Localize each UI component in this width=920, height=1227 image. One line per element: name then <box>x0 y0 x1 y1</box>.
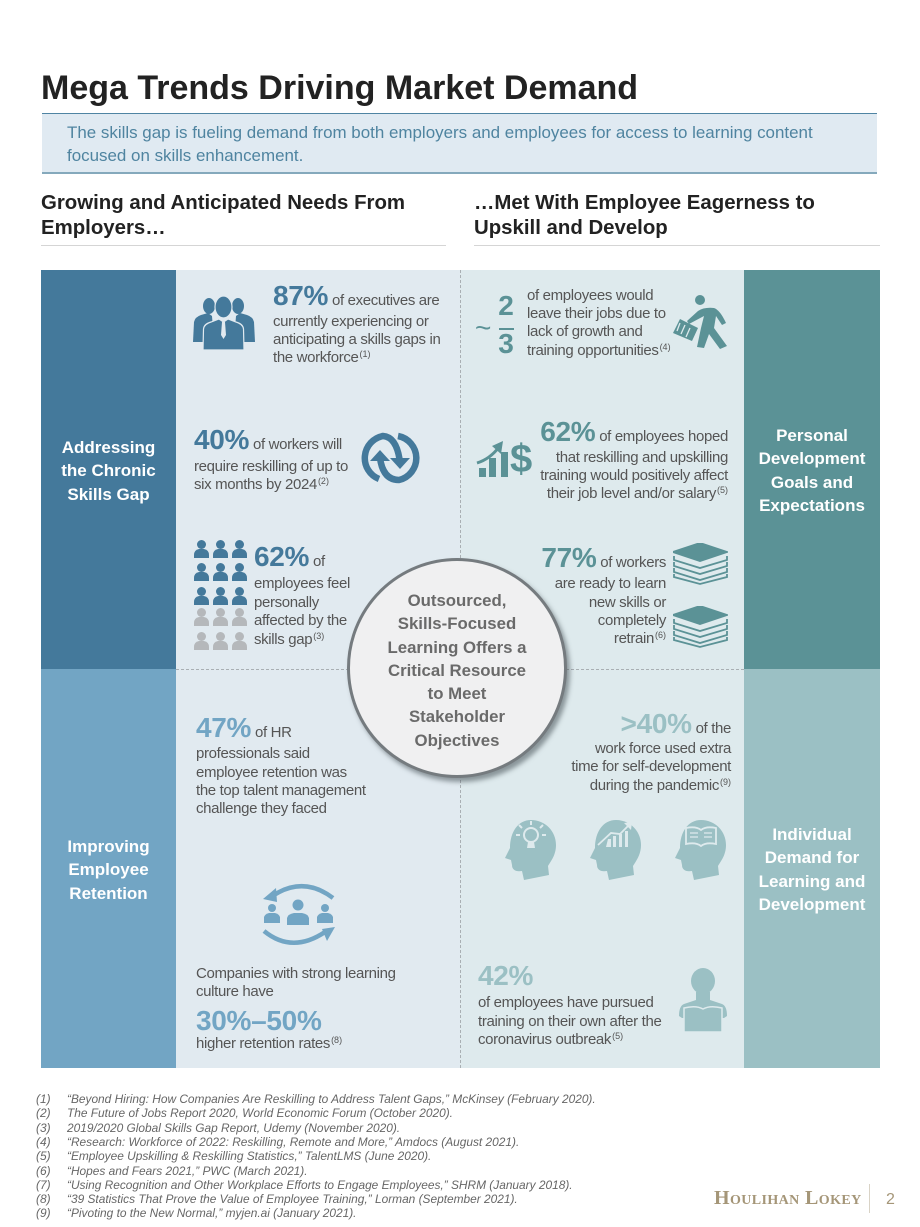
subtitle banner <box>42 113 877 174</box>
stat: 42% of employees pursued training: training on their own after the <box>478 1013 661 1030</box>
footnotes: (9) <box>36 1206 51 1220</box>
footnotes: (8) <box>36 1192 51 1206</box>
stat: two thirds fraction: 2 <box>498 290 514 321</box>
stat: 42% of employees pursued training: 42% <box>478 960 533 991</box>
footnotes: 2019/2020 Global Skills Gap Report, Udemy (November 2020). <box>67 1121 400 1135</box>
footnotes: “Employee Upskilling & Reskilling Statistics,” TalentLMS (June 2020). <box>67 1149 431 1163</box>
panel: addressing the chronic skills gap: Skills Gap <box>67 485 150 504</box>
subtitle banner: The skills gap is fueling demand from both employers and employees for access to learning content <box>67 123 813 142</box>
panel: personal development goals: Goals and <box>771 473 853 492</box>
stat: 42% of employees pursued training: of employees have pursued <box>478 994 654 1011</box>
footnotes <box>36 1092 596 1220</box>
stat: 87% of executives: the workforce(1) <box>273 349 370 366</box>
footnotes: (6) <box>36 1164 51 1178</box>
stat: 42% of employees pursued training: coronavirus outbreak(5) <box>478 1031 623 1048</box>
stat: 30%-50% higher retention: Companies with strong learning <box>196 965 396 982</box>
panel: left content background <box>176 270 460 1068</box>
right column heading: …Met With Employee Eagerness to <box>474 192 815 214</box>
footnotes: “Pivoting to the New Normal,” myjen.ai (January 2021). <box>67 1206 356 1220</box>
left column heading: Growing and Anticipated Needs From <box>41 192 405 214</box>
panel: individual demand: Learning and <box>759 872 865 891</box>
stat: 62% of employees hoped: their job level and/or salary(5) <box>547 485 728 502</box>
panel: individual demand: Demand for <box>765 848 859 867</box>
stat: >40% of the work force: work force used extra <box>595 740 731 757</box>
stat: >40% of the work force: during the pandemic(9) <box>590 777 731 794</box>
panel: personal development goals <box>744 270 880 669</box>
footnotes: “Using Recognition and Other Workplace Efforts to Engage Employees,” SHRM (January 2018). <box>67 1178 573 1192</box>
footnotes: “Research: Workforce of 2022: Reskilling, Remote and More,” Amdocs (August 2021). <box>67 1135 519 1149</box>
footnotes: (3) <box>36 1121 51 1135</box>
stat: 40% of workers <box>194 424 348 493</box>
title: Mega Trends Driving Market Demand <box>41 69 638 107</box>
stat: 62% of employees hoped: 62% of employees hoped <box>540 416 728 447</box>
stat: 62% of employees hoped: that reskilling and upskilling <box>556 449 728 466</box>
panel: improving employee retention: Improving <box>67 837 150 856</box>
center circle callout <box>347 558 567 778</box>
stat: 47% of HR professionals: 47% of HR <box>196 712 292 743</box>
stat: 40% of workers: six months by 2024(2) <box>194 476 329 493</box>
footnotes: “Beyond Hiring: How Companies Are Reskilling to Address Talent Gaps,” McKinsey (February 2020). <box>67 1092 596 1106</box>
icon: head with light bulb <box>505 820 556 880</box>
stat: 47% of HR professionals: professionals said <box>196 745 310 762</box>
center circle callout: Outsourced, <box>408 591 506 610</box>
icon: executives group <box>193 296 255 350</box>
panel: improving employee retention: Employee <box>68 860 149 879</box>
panel: personal development goals: Personal <box>776 426 848 445</box>
center circle callout: Stakeholder <box>409 707 505 726</box>
stat: 77% of workers <box>541 542 666 647</box>
panel: right content background <box>460 270 744 1068</box>
panel: addressing the chronic skills gap <box>41 270 176 669</box>
stat: 42% of employees pursued training <box>478 960 662 1048</box>
icon: book stack two <box>673 606 728 648</box>
vertical dotted divider <box>460 270 461 1068</box>
stat: 62% of employees feel affected <box>254 541 350 648</box>
panel: addressing the chronic skills gap: the Chronic <box>61 461 156 480</box>
stat: 30%-50% higher retention: higher retention rates(8) <box>196 1035 342 1052</box>
footnotes: “Hopes and Fears 2021,” PWC (March 2021). <box>67 1164 308 1178</box>
icon: person reading book <box>679 968 727 1032</box>
icon: book stack one <box>673 543 728 585</box>
icon: head with growth chart <box>590 820 641 880</box>
center circle callout: Learning Offers a <box>388 638 526 657</box>
panel: individual demand: Individual <box>772 825 852 844</box>
text: employees would leave: training opportunities(4) <box>527 342 671 359</box>
footnotes: “39 Statistics That Prove the Value of Employee Training,” Lorman (September 2021). <box>67 1192 518 1206</box>
stat: 77% of workers: completely <box>598 612 666 629</box>
footer divider and page number <box>869 1184 910 1213</box>
center circle callout: Objectives <box>415 731 499 750</box>
stat: 77% of workers: retrain(6) <box>614 630 666 647</box>
stat: two thirds fraction: ~ <box>475 312 491 343</box>
footnotes: (1) <box>36 1092 51 1106</box>
stat: 62% of employees feel affected: affected by the <box>254 612 347 629</box>
stat: two thirds fraction: 3 <box>498 328 514 359</box>
text: employees would leave: lack of growth and <box>527 323 642 340</box>
stat: 47% of HR professionals: challenge they faced <box>196 800 327 817</box>
stat: 47% of HR professionals: the top talent management <box>196 782 366 799</box>
logo: Houlihan Lokey: Houlihan Lokey <box>714 1187 862 1209</box>
stat: 87% of executives: anticipating a skills gaps in <box>273 331 440 348</box>
center circle callout: Critical Resource <box>388 661 526 680</box>
panel: personal development goals: Development <box>759 449 865 468</box>
center circle callout: Skills-Focused <box>398 614 516 633</box>
stat: 87% of executives <box>273 280 440 366</box>
right column heading <box>474 191 880 246</box>
icon: growth chart with dollar <box>476 438 532 480</box>
stat: 62% of employees hoped: training would positively affect <box>540 467 728 484</box>
stat: 62% of employees feel affected: employees feel <box>254 575 350 592</box>
stat: 30%-50% higher retention <box>196 965 396 1052</box>
stat: >40% of the work force <box>571 708 732 794</box>
stat: 30%-50% higher retention: 30%–50% <box>196 1005 322 1036</box>
icon: reskilling cycle <box>362 432 420 484</box>
stat: >40% of the work force: >40% of the <box>621 708 731 739</box>
text: employees would leave: leave their jobs due to <box>527 305 666 322</box>
icon: man walking with briefcase <box>673 295 727 349</box>
stat: 62% of employees feel affected: personally <box>254 594 319 611</box>
text: employees would leave <box>527 287 671 359</box>
subtitle banner: focused on skills enhancement. <box>67 146 303 165</box>
stat: 30%-50% higher retention: culture have <box>196 983 274 1000</box>
panel: addressing the chronic skills gap: Addressing <box>62 438 155 457</box>
stat: 87% of executives: 87% of executives are <box>273 280 439 311</box>
stat: 62% of employees feel affected: skills gap(3) <box>254 631 324 648</box>
footnotes: The Future of Jobs Report 2020, World Economic Forum (October 2020). <box>67 1106 453 1120</box>
icon: retention arrows and people <box>262 884 335 945</box>
stat: >40% of the work force: time for self-development <box>571 758 731 775</box>
footnotes: (2) <box>36 1106 51 1120</box>
footnotes: (4) <box>36 1135 51 1149</box>
stat: 40% of workers: require reskilling of up to <box>194 458 348 475</box>
stat: 47% of HR professionals: employee retention was <box>196 764 347 781</box>
panel: individual demand: Development <box>759 895 865 914</box>
stat: 40% of workers: 40% of workers will <box>194 424 342 455</box>
stat: 87% of executives: currently experiencing or <box>273 313 428 330</box>
panel: personal development goals: Expectations <box>759 496 865 515</box>
panel: individual demand <box>744 669 880 1068</box>
icon: head with open book <box>675 820 726 880</box>
stat: 47% of HR professionals <box>196 712 366 817</box>
panel: improving employee retention <box>41 669 176 1068</box>
panel: improving employee retention: Retention <box>69 884 148 903</box>
footnotes: (7) <box>36 1178 51 1192</box>
center circle callout: to Meet <box>428 684 486 703</box>
icon: people grid 62 percent <box>194 540 247 650</box>
text: employees would leave: of employees would <box>527 287 653 304</box>
horizontal dotted divider <box>176 668 744 670</box>
stat: 62% of employees hoped <box>540 416 728 502</box>
stat: 77% of workers: new skills or <box>589 594 666 611</box>
stat: two thirds fraction <box>475 290 514 359</box>
left column heading: Employers… <box>41 217 166 239</box>
stat: 62% of employees feel affected: 62% of <box>254 541 325 572</box>
right column heading: Upskill and Develop <box>474 217 668 239</box>
left column heading <box>41 191 446 246</box>
stat: 77% of workers: are ready to learn <box>555 575 666 592</box>
stat: 77% of workers: 77% of workers <box>541 542 666 573</box>
footnotes: (5) <box>36 1149 51 1163</box>
footer divider and page number: 2 <box>886 1191 895 1208</box>
